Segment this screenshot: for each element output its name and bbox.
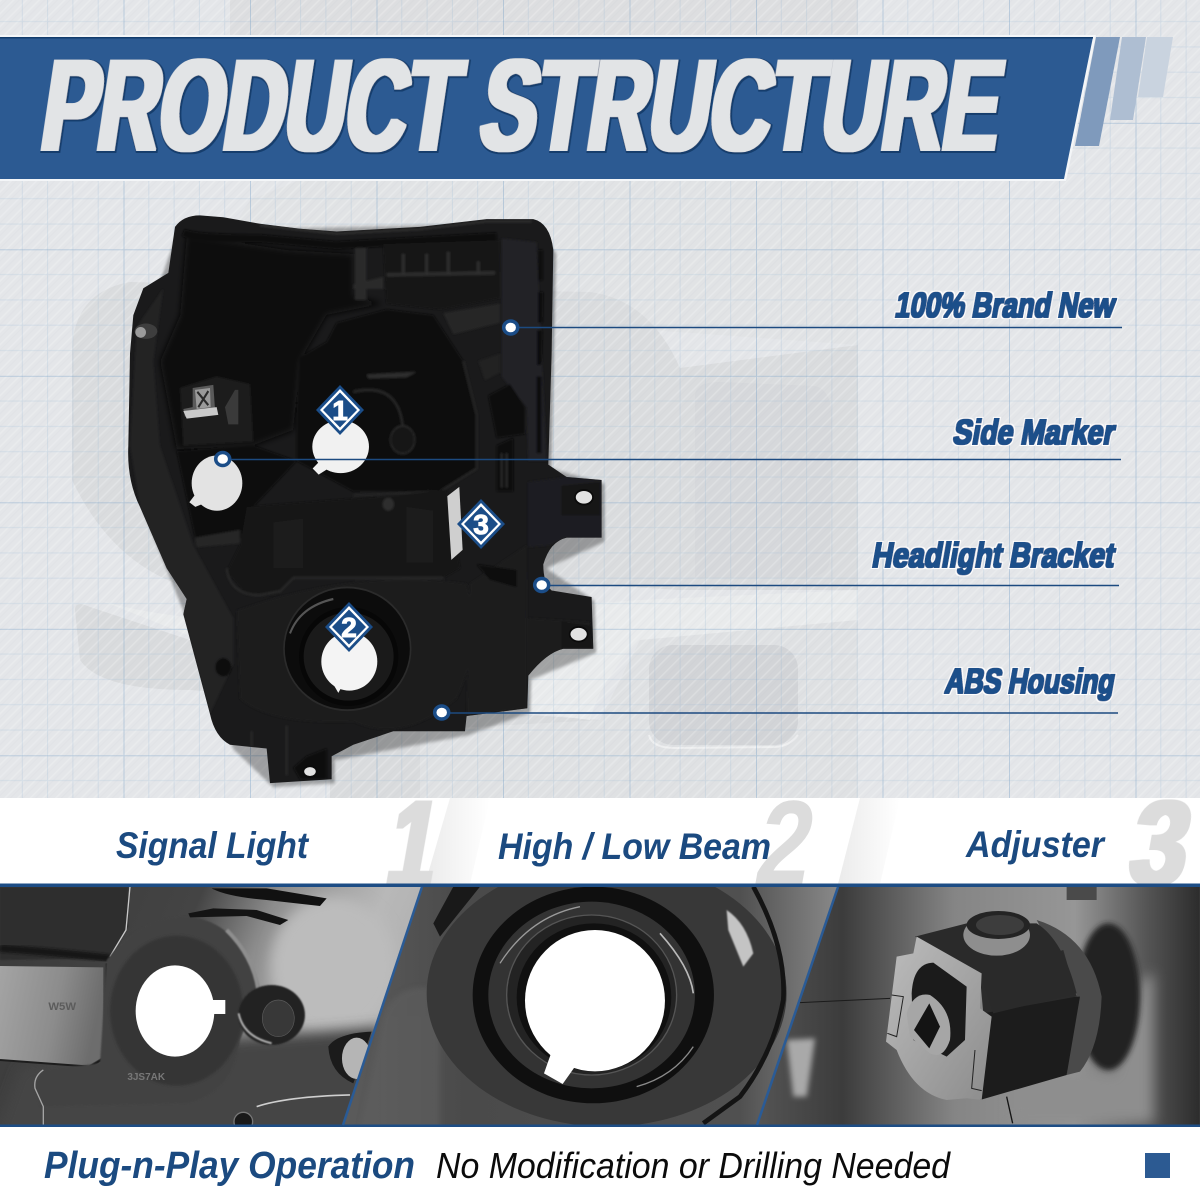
low beam hole [525,930,665,1084]
adjuster drum [915,920,1102,1100]
icon: socket connector [183,385,238,424]
bottom lobe [237,580,473,729]
callout: Headlight Bracket [535,536,1119,592]
marker diamond 2: 2 [341,612,357,643]
marker diamond 3 [457,499,505,549]
bracket area [528,477,602,547]
lower right panel [467,545,527,716]
truck silhouette [72,0,858,798]
marker diamond 3: 3 [473,509,489,540]
marker diamond 1: 1 [332,395,348,426]
headlight rear view [128,215,605,787]
decorative banner stripes [1075,37,1173,146]
callout: Side Marker: Side Marker [951,413,1119,452]
upper dark cavity [160,235,383,449]
low beam ring and hole [284,587,411,710]
embossed mark W5W: W5W [48,1001,76,1013]
feature 2 heading [498,776,825,910]
drop shadow [133,223,605,787]
feature 2 heading: 2 [747,776,825,910]
feature 1 heading [116,776,449,910]
photo frame lines [0,884,1200,1128]
feature title band [0,776,1200,910]
lower-left panel [177,446,297,545]
marker diamond 1 [316,385,364,435]
retaining clips [188,888,327,925]
photo panel: signal light [0,887,421,1124]
strap [488,384,525,438]
side marker hole [189,455,242,511]
callout: Side Marker [216,413,1121,466]
square marker [1145,1153,1170,1178]
callout: 100% Brand New [504,286,1122,334]
central bulge around bulb 1 [297,309,477,492]
signal light hole [136,965,225,1057]
ribbed upper panel [353,240,501,380]
photo panel: high / low beam [344,887,837,1124]
marker diamond 2 [325,602,373,652]
feature 2 heading: High / Low Beam [498,826,771,867]
socket block [180,376,253,446]
rear cover box [230,488,459,576]
feature 1 heading: Signal Light [116,825,310,866]
bulb hole 1 [312,420,369,475]
embossed mark 3JS7AK: 3JS7AK [127,1072,166,1083]
right side strip [502,238,547,461]
background: blueprint paper with truck silhouette [0,0,1200,800]
rim highlight [260,221,532,234]
callout: Headlight Bracket: Headlight Bracket [870,536,1119,575]
plug-n-play heading: Plug-n-Play Operation [44,1145,415,1187]
bottom strip [0,1127,1200,1200]
feature 3 heading [965,776,1200,910]
callout: 100% Brand New: 100% Brand New [893,286,1119,325]
left flange shading [130,288,233,714]
bracket mounting holes [303,490,593,777]
no modification note: No Modification or Drilling Needed [436,1145,951,1186]
housing body [128,215,602,783]
photo panel: adjuster [753,880,1200,1130]
adjuster metal bracket [886,937,992,1100]
adjuster screw head [963,911,1030,956]
title banner [0,33,1096,181]
callout: ABS Housing: ABS Housing [943,662,1118,701]
feature 3 heading: Adjuster [965,824,1106,865]
feature 1 heading: 1 [379,776,449,910]
white label strip [447,487,463,560]
callout: ABS Housing [435,662,1118,719]
icon: mounting bolt [135,324,157,339]
